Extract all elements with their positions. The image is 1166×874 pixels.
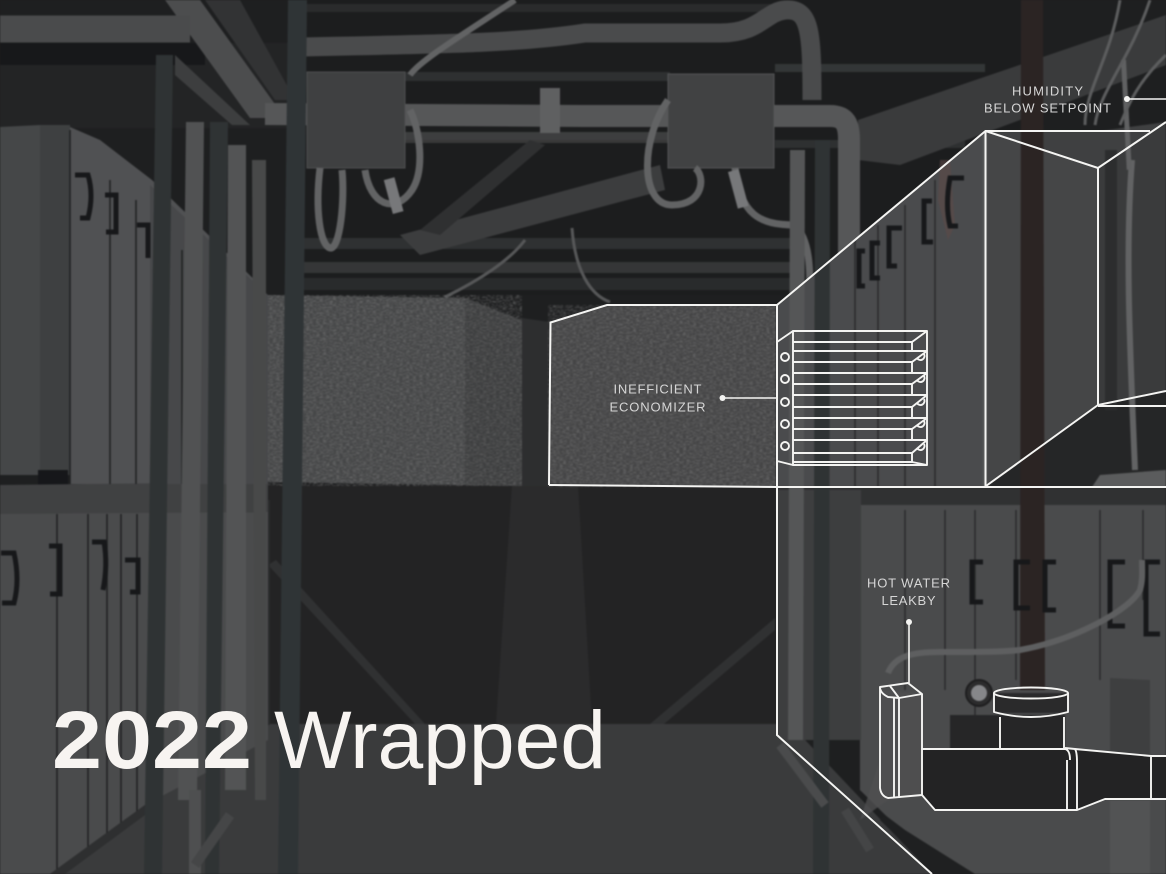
callout: inefficient economizer: ECONOMIZER [610,400,706,414]
line art: air handling unit outline [549,122,1166,874]
callout: inefficient economizer: INEFFICIENT [614,382,702,396]
line art: hot water valve and piping [880,683,1166,810]
callout: hot water leakby [867,576,950,683]
floor [50,724,932,874]
ceiling rear wall and beams [0,0,1166,295]
title: Wrapped [274,695,606,786]
callout: inefficient economizer [610,382,777,414]
upper pipes [0,10,849,490]
title [52,695,606,786]
right air handling units [776,0,1166,874]
lower right hose [888,560,1142,673]
rear foil-wrapped duct and concrete base [268,295,778,725]
line art: economizer louver [777,331,927,465]
pump and pressure gauge [860,680,1166,820]
callout: humidity below setpoint: HUMIDITY [1012,84,1083,98]
callout: hot water leakby: LEAKBY [882,593,936,608]
junction boxes and hoses [307,0,810,302]
callout: hot water leakby: HOT WATER [867,576,950,590]
title: 2022 [52,695,252,786]
callout: humidity below setpoint: BELOW SETPOINT [984,100,1111,116]
left air handling units [0,125,270,874]
door handles [1,175,1160,634]
callout: humidity below setpoint [984,84,1166,116]
